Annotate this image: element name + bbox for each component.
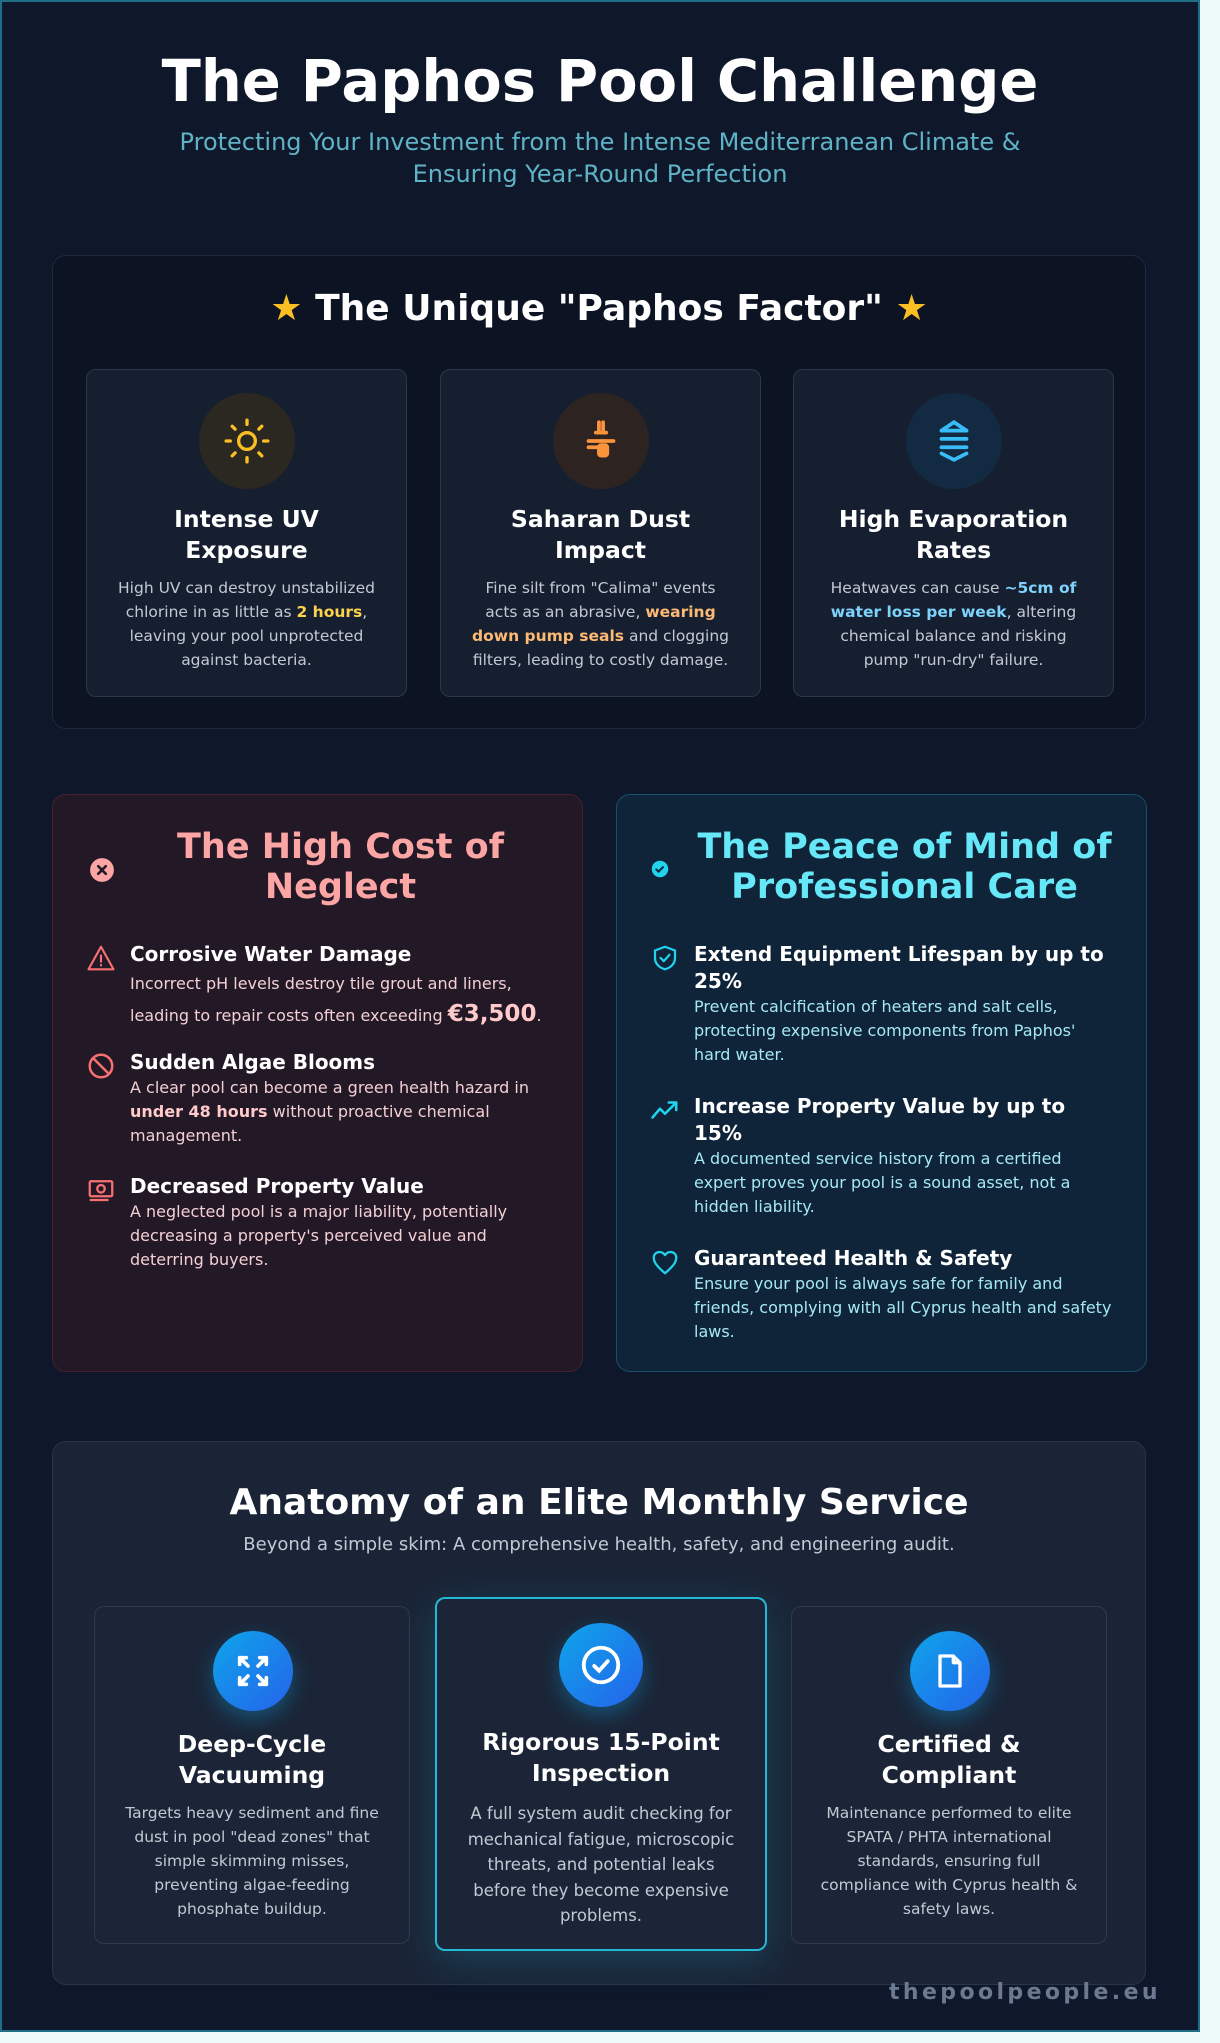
heading: neglect: Neglect [265, 867, 416, 907]
item: property value: Decreased Property Value [130, 1174, 424, 1198]
item: corrosive: leading to repair costs often exceeding €3,500. [130, 1001, 542, 1027]
icon: check [559, 1623, 643, 1707]
icon: document [910, 1631, 990, 1711]
subheading: Beyond a simple skim: A comprehensive health, safety, and engineering audit. [243, 1534, 955, 1555]
heading: anatomy: Anatomy of an Elite Monthly Service [229, 1482, 969, 1523]
card: certified [791, 1606, 1107, 1944]
card: inspection (highlighted): Rigorous 15-Point [482, 1728, 720, 1756]
item: health & safety: Guaranteed Health & Safety [694, 1246, 1012, 1270]
card: dust: Saharan Dust [511, 505, 690, 533]
item: health & safety: friends, complying with all Cyprus health and safety [694, 1298, 1111, 1317]
panel: cost of neglect [52, 794, 583, 1372]
icon: check circle [652, 860, 668, 878]
item: health & safety [652, 1246, 1111, 1341]
item: property value: A neglected pool is a major liability, potentially decreasing a property's perceived value and deterring buyers. [130, 1202, 507, 1269]
card: dust [440, 369, 761, 697]
card: UV: Exposure [185, 536, 308, 564]
icon: brush [553, 393, 649, 489]
card: inspection (highlighted): Inspection [532, 1759, 670, 1787]
item: lifespan: protecting expensive components from Paphos' [694, 1021, 1075, 1040]
item: health & safety: laws. [694, 1322, 735, 1341]
icon: expand [213, 1631, 293, 1711]
panel: paphos factor [52, 255, 1146, 729]
card: certified: Compliant [882, 1761, 1016, 1789]
panel: professional care [616, 794, 1147, 1372]
item: algae: A clear pool can become a green health hazard in under 48 hours without proactive chemical management. [130, 1078, 529, 1145]
subtitle: Protecting Your Investment from the Intense Mediterranean Climate & [180, 128, 1020, 156]
item: property value [88, 1174, 507, 1269]
card: inspection (highlighted) [435, 1597, 767, 1951]
card: vacuuming: Deep-Cycle [178, 1730, 326, 1758]
heading: neglect: The High Cost of [177, 827, 504, 867]
item: health & safety: Ensure your pool is always safe for family and [694, 1274, 1062, 1293]
heading: professional care: The Peace of Mind of [697, 827, 1112, 867]
heading: professional care [697, 827, 1112, 907]
item: property value up [651, 1094, 1070, 1216]
item: algae [88, 1050, 529, 1145]
card: vacuuming: Targets heavy sediment and fine dust in pool "dead zones" that simple skimming misses, preventing algae-feeding phosphate buildup. [125, 1804, 379, 1918]
item: lifespan [654, 942, 1104, 1064]
footer: website: thepoolpeople.eu [889, 1980, 1161, 2005]
card: evaporation: Heatwaves can cause ~5cm of water loss per week, altering chemical balance and risking pump "run-dry" failure. [831, 579, 1076, 669]
heading: paphos factor: ★ The Unique "Paphos Factor" ★ [270, 288, 928, 329]
icon: water levels [906, 393, 1002, 489]
item: lifespan: Extend Equipment Lifespan by up to [694, 942, 1104, 966]
panel: anatomy of service [52, 1441, 1146, 1985]
item: corrosive: Corrosive Water Damage [130, 942, 411, 966]
item: corrosive: Incorrect pH levels destroy tile grout and liners, [130, 974, 512, 993]
card: vacuuming: Vacuuming [179, 1761, 325, 1789]
card: certified: Certified & [878, 1730, 1020, 1758]
item: property value up: 15% [694, 1121, 742, 1145]
item: property value up: expert proves your pool is a sound asset, not a [694, 1173, 1070, 1192]
item: lifespan: 25% [694, 969, 742, 993]
card: vacuuming [94, 1606, 410, 1944]
card: evaporation: Rates [916, 536, 991, 564]
item: lifespan: hard water. [694, 1045, 785, 1064]
icon: x circle [90, 858, 114, 882]
card: evaporation: High Evaporation [839, 505, 1068, 533]
subtitle [180, 128, 1020, 188]
card: inspection (highlighted): A full system audit checking for mechanical fatigue, microscopic threats, and potential leaks before they become expensive problems. [468, 1804, 734, 1925]
subtitle: Ensuring Year-Round Perfection [413, 160, 787, 188]
item: property value up: A documented service history from a certified [694, 1149, 1062, 1168]
item: corrosive [87, 942, 542, 1027]
title: The Paphos Pool Challenge [162, 48, 1038, 115]
card: dust: Fine silt from "Calima" events acts as an abrasive, wearing down pump seals and clogging filters, leading to costly damage. [472, 579, 729, 669]
item: property value up: hidden liability. [694, 1197, 815, 1216]
heading: neglect [177, 827, 504, 907]
card: evaporation [793, 369, 1114, 697]
heading: professional care: Professional Care [731, 867, 1078, 907]
icon: sun [199, 393, 295, 489]
card: dust: Impact [555, 536, 646, 564]
item: algae: Sudden Algae Blooms [130, 1050, 375, 1074]
card: UV [86, 369, 407, 697]
card: certified: Maintenance performed to elite SPATA / PHTA international standards, ensuring full compliance with Cyprus health & safety laws. [821, 1804, 1077, 1918]
item: property value up: Increase Property Value by up to [694, 1094, 1065, 1118]
item: lifespan: Prevent calcification of heaters and salt cells, [694, 997, 1057, 1016]
card: UV: High UV can destroy unstabilized chlorine in as little as 2 hours, leaving your pool unprotected against bacteria. [118, 579, 375, 669]
card: UV: Intense UV [174, 505, 319, 533]
